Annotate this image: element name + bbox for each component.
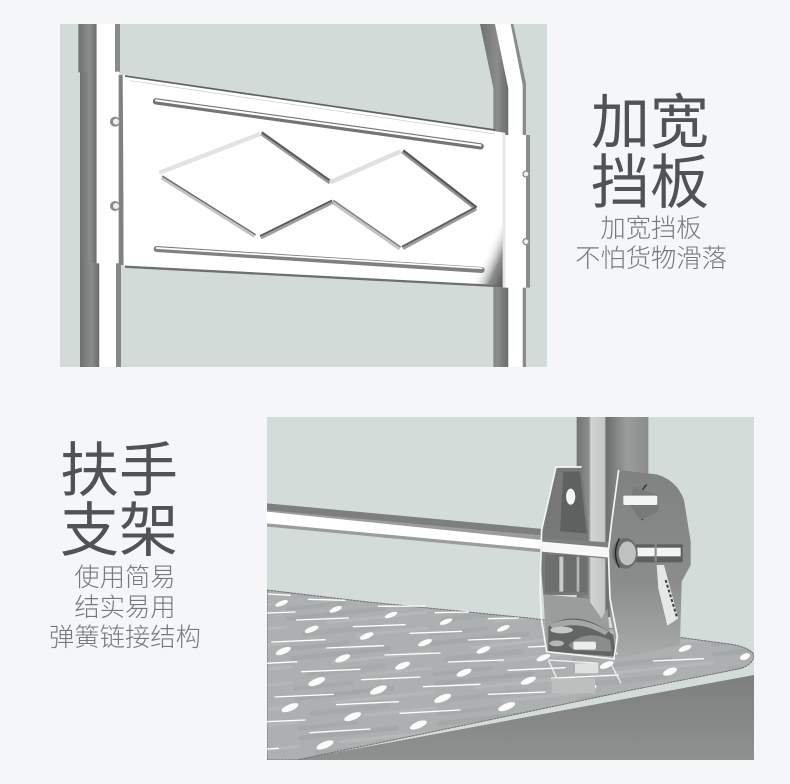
heading: 加宽挡板: 挡板 xyxy=(591,150,709,216)
text: baffle description: 加宽挡板 xyxy=(600,215,702,243)
rod end xyxy=(636,544,683,562)
upper rib xyxy=(156,101,481,146)
left upright tube xyxy=(78,24,123,367)
deck streaks xyxy=(267,594,703,749)
right upright tube xyxy=(480,24,530,367)
text: handrail description: 结实易用 xyxy=(74,594,176,622)
text: handrail description: 使用简易 xyxy=(74,564,176,592)
checker plate deck xyxy=(267,590,754,760)
polished bracket edges xyxy=(540,467,619,659)
double diamond emboss xyxy=(159,132,477,248)
lower bolt head xyxy=(612,538,638,569)
bracket front plate xyxy=(608,470,691,658)
deck studs xyxy=(275,599,751,751)
text: baffle description: 不怕货物滑落 xyxy=(575,245,727,273)
heading: 加宽挡板: 加宽 xyxy=(591,90,709,156)
rear handrail shadow xyxy=(267,503,543,536)
heading: 扶手支架: 扶手 xyxy=(60,438,178,504)
spring mechanism xyxy=(548,618,616,657)
steel baffle plate xyxy=(123,75,505,287)
text: baffle description xyxy=(575,215,727,273)
bracket reflection xyxy=(548,660,621,693)
rear bracket plate xyxy=(540,467,616,655)
lower rib xyxy=(157,249,482,270)
heading: 加宽挡板 xyxy=(591,90,709,216)
text: handrail description: 弹簧链接结构 xyxy=(49,624,201,652)
upper bolt xyxy=(638,484,647,520)
text: handrail description xyxy=(49,564,201,652)
rod inside bracket xyxy=(542,538,610,559)
panel: widened baffle photo xyxy=(60,24,547,367)
handrail rod xyxy=(267,510,542,552)
panel: handrail bracket photo xyxy=(267,417,754,760)
heading: 扶手支架: 支架 xyxy=(60,498,178,564)
platform side xyxy=(295,675,754,760)
bracket assembly xyxy=(540,467,691,659)
upright tube xyxy=(577,417,648,617)
heading: 扶手支架 xyxy=(60,438,178,564)
